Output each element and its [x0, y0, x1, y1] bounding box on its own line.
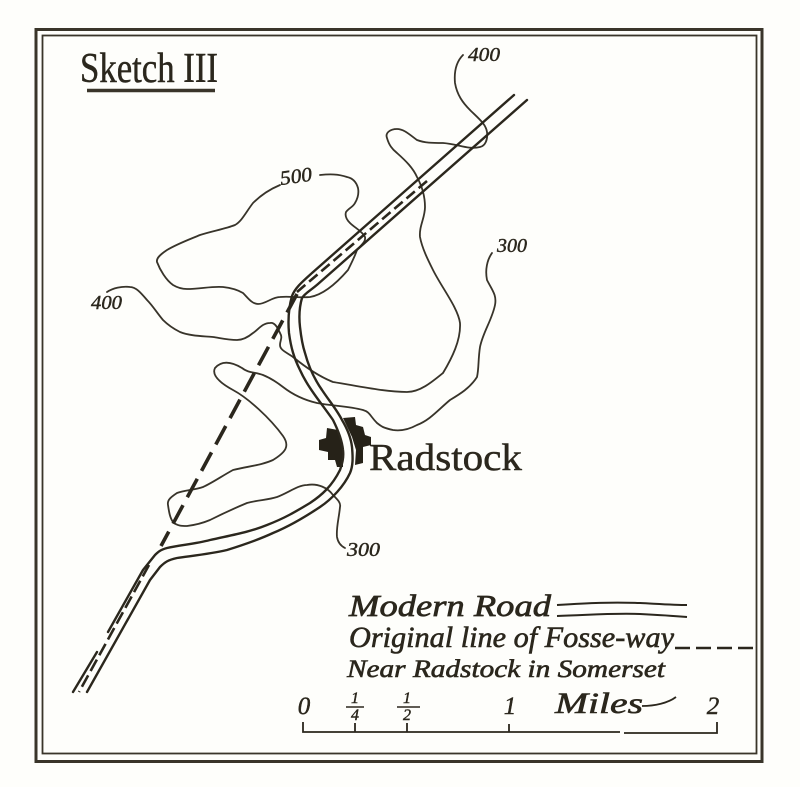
scale line and ticks — [303, 722, 717, 733]
contour label: 400 left: 400 — [91, 292, 122, 314]
contour label: 300 right: 300 — [496, 235, 527, 257]
scale bar — [298, 687, 719, 733]
legend symbol: modern road — [557, 603, 687, 617]
scale labels: 1 — [403, 690, 411, 707]
road edge: upper — [73, 95, 514, 692]
place label: Radstock: Radstock — [369, 437, 522, 479]
legend text: Near Radstock in Somerset: Near Radstock in Somerset — [346, 656, 666, 683]
contour: 500 ft — [157, 174, 365, 304]
scale title: Miles — [554, 687, 676, 720]
legend text: Modern Road: Modern Road — [348, 588, 552, 623]
scale labels: 2 — [707, 693, 719, 720]
legend text: Original line of Fosse-way: Original line of Fosse-way — [349, 621, 675, 654]
scale labels: 0 — [298, 693, 311, 720]
town block: Radstock — [319, 417, 371, 467]
contour: 300 ft — [168, 253, 495, 548]
modern road — [73, 95, 527, 692]
fraction strokes — [346, 706, 420, 708]
contour label: 300 bottom: 300 — [346, 539, 380, 561]
road edge: lower — [87, 100, 527, 692]
original Fosse-way dashed line — [79, 181, 427, 692]
contour label: 500: 500 — [279, 164, 313, 190]
scale labels: 1 — [504, 693, 516, 720]
legend — [346, 588, 753, 683]
legend symbol: Fosse-way dashes — [675, 647, 753, 649]
contour: 400 ft — [107, 55, 487, 392]
scale labels: 1 — [351, 690, 359, 707]
contour label: 400 top: 400 — [468, 44, 500, 66]
scale title: Miles: Miles — [554, 687, 643, 720]
title: Sketch III: Sketch III — [80, 46, 218, 92]
scale labels: 4 — [351, 707, 359, 724]
scale labels: 2 — [403, 707, 411, 724]
scale labels — [298, 690, 719, 724]
contour lines — [107, 55, 495, 548]
